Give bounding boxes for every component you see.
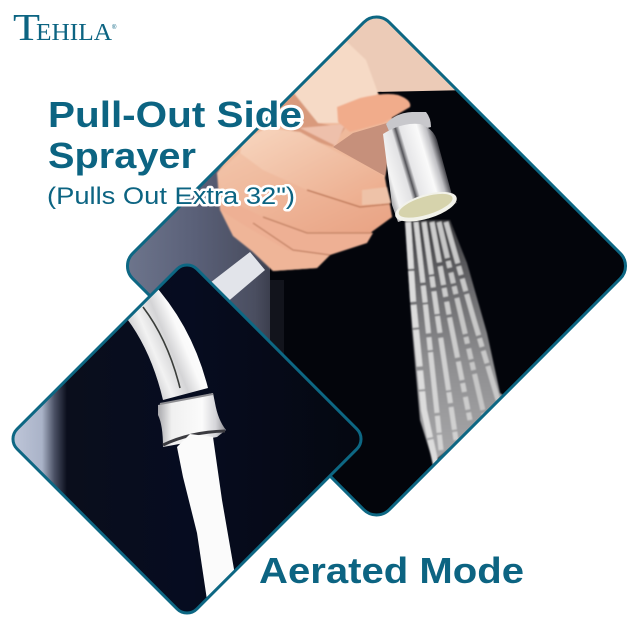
heading: Aerated Mode: Aerated Mode — [259, 550, 524, 591]
hand: fingers and thumb — [217, 40, 410, 271]
aerator face — [395, 192, 457, 222]
logo: Tehila: EHILA — [36, 20, 113, 46]
faucet collar — [158, 393, 226, 447]
background — [14, 266, 332, 612]
aerated water stream — [177, 434, 235, 600]
forearm — [346, 18, 456, 92]
sprayer handle — [333, 123, 390, 176]
faucet spout — [128, 290, 208, 400]
background — [129, 90, 624, 514]
logo: Tehila: T — [13, 7, 40, 49]
sprayer head — [383, 112, 457, 222]
logo: Tehila: ® — [112, 24, 117, 31]
heading: Pull-Out Side Sprayer — [48, 94, 302, 176]
logo: Tehila — [13, 7, 117, 49]
photo panel: aerated faucet stream — [7, 259, 367, 620]
hose — [212, 252, 265, 300]
big diamond border — [120, 10, 633, 522]
subheading: pulls out extra 32 inches: (Pulls Out Extra 32") — [47, 183, 295, 210]
small diamond border — [7, 259, 367, 619]
heading: Pull-Out Side Sprayer: Pull-Out Side — [48, 94, 302, 135]
photo panel: hand holding pull-out sprayer — [120, 10, 640, 530]
spray of water — [405, 220, 510, 465]
heading: Pull-Out Side Sprayer: Sprayer — [48, 135, 196, 176]
